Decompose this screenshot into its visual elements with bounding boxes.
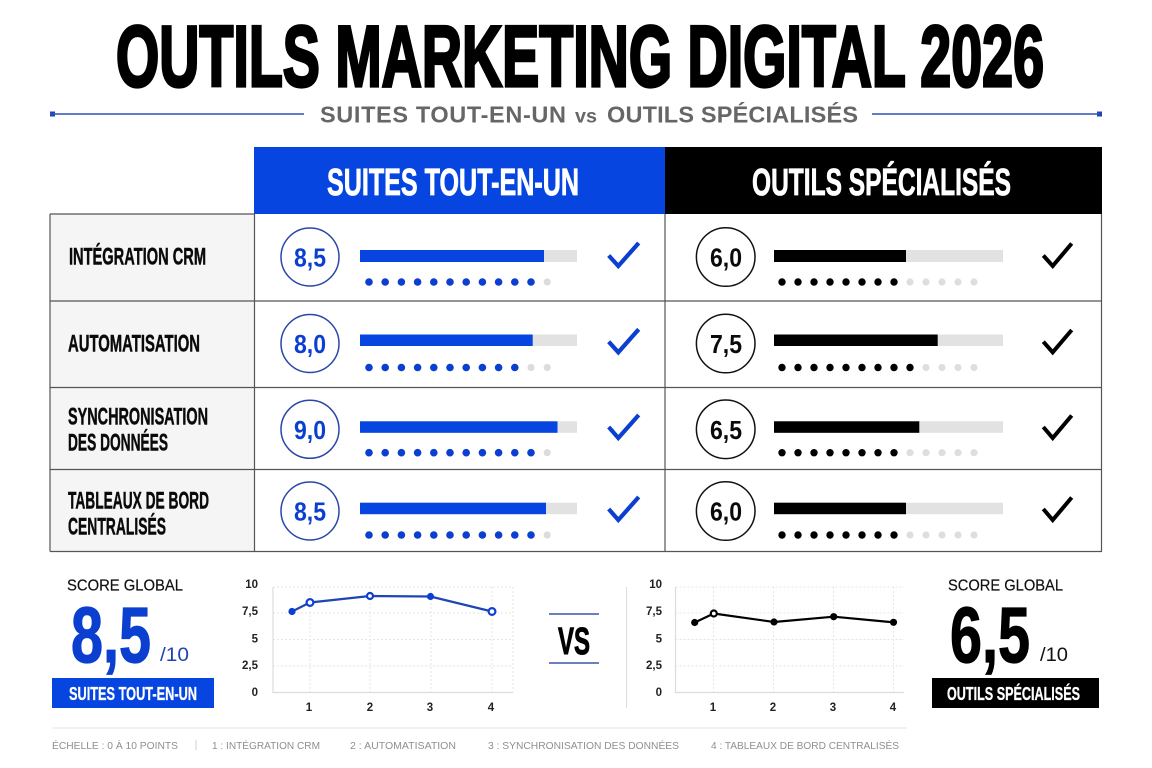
suites row 1 score: 8,5 xyxy=(294,242,326,272)
line chart: suites: 2 xyxy=(367,702,373,714)
footer legend: 1 : INTÉGRATION CRM xyxy=(212,739,320,752)
outils row 3 score xyxy=(696,400,1072,459)
column header: outils: OUTILS SPÉCIALISÉS xyxy=(752,160,1011,204)
vs badge: VS xyxy=(558,621,590,663)
row label: synchronisation: DES DONNÉES xyxy=(68,428,168,456)
line chart: suites xyxy=(242,579,513,714)
line chart: outils: 7,5 xyxy=(646,606,663,618)
row label: tableaux de bord: TABLEAUX DE BORD xyxy=(68,488,209,514)
panel: global score outils: /10 xyxy=(1040,645,1068,666)
line chart: outils: 1 xyxy=(710,702,717,714)
subtitle with rules: OUTILS SPÉCIALISÉS xyxy=(607,100,858,128)
outils row 1 score: 6,0 xyxy=(710,242,742,272)
row label: intégration CRM: INTÉGRATION CRM xyxy=(69,242,206,270)
panel: global score outils: OUTILS SPÉCIALISÉS xyxy=(947,683,1080,704)
row label backgrounds and grid xyxy=(50,214,1102,552)
line chart: outils: 4 xyxy=(890,702,897,714)
panel: global score outils: 6,5 xyxy=(950,590,1030,679)
suites row 3 score xyxy=(281,400,639,458)
column header: outils xyxy=(665,147,1102,214)
line chart: suites: 10 xyxy=(245,579,258,591)
line chart: outils: 5 xyxy=(656,634,663,646)
row label: automatisation: AUTOMATISATION xyxy=(68,330,200,358)
line chart: suites: 1 xyxy=(306,702,313,714)
suites row 2 score xyxy=(281,314,639,372)
comparison table xyxy=(50,147,1102,552)
line chart: outils: 2,5 xyxy=(646,660,663,672)
line chart: outils: 0 xyxy=(656,687,662,699)
suites row 3 score: 9,0 xyxy=(294,415,326,445)
line chart: suites: 2,5 xyxy=(242,660,259,672)
row label: tableaux de bord xyxy=(68,488,209,540)
footer legend: 2 : AUTOMATISATION xyxy=(350,740,456,752)
subtitle with rules: SUITES TOUT-EN-UN xyxy=(320,102,566,128)
panel: global score suites: 8,5 xyxy=(71,590,151,679)
footer legend xyxy=(52,739,899,752)
outils row 4 score xyxy=(696,482,1072,540)
panel: global score outils: SCORE GLOBAL xyxy=(948,578,1063,594)
line chart: suites: 4 xyxy=(488,702,495,714)
panel: global score outils xyxy=(932,578,1099,708)
outils row 2 score: 7,5 xyxy=(710,329,742,359)
footer legend: 4 : TABLEAUX DE BORD CENTRALISÉS xyxy=(711,739,899,752)
suites row 4 score xyxy=(281,482,639,540)
panel: global score suites: SUITES TOUT-EN-UN xyxy=(69,684,197,704)
row label: tableaux de bord: CENTRALISÉS xyxy=(68,512,166,540)
line chart: outils: 10 xyxy=(649,579,662,591)
line chart: suites: 0 xyxy=(252,687,258,699)
line chart: suites: 3 xyxy=(427,702,433,714)
row label: synchronisation: SYNCHRONISATION xyxy=(68,404,208,430)
line chart: suites: 7,5 xyxy=(242,606,259,618)
outils row 2 score xyxy=(696,314,1072,373)
subtitle with rules: vs xyxy=(575,106,597,128)
outils row 3 score: 6,5 xyxy=(710,415,742,445)
panel: global score suites: SCORE GLOBAL xyxy=(67,578,183,594)
suites row 1 score xyxy=(281,228,639,286)
column header: suites: SUITES TOUT-EN-UN xyxy=(327,162,579,204)
panel: global score suites: /10 xyxy=(160,645,189,666)
line chart: outils: 2 xyxy=(770,702,776,714)
footer legend: 3 : SYNCHRONISATION DES DONNÉES xyxy=(488,739,679,752)
vs badge xyxy=(549,614,599,663)
line chart: outils: 3 xyxy=(830,702,836,714)
panel: global score suites xyxy=(52,578,214,708)
suites row 4 score: 8,5 xyxy=(294,496,326,526)
subtitle with rules xyxy=(50,100,1102,128)
outils row 4 score: 6,0 xyxy=(710,496,742,526)
footer legend: ÉCHELLE : 0 À 10 POINTS xyxy=(52,739,178,752)
suites row 2 score: 8,0 xyxy=(294,329,326,359)
column header: suites xyxy=(254,147,665,214)
row label: synchronisation xyxy=(68,404,208,456)
line chart: outils xyxy=(646,579,904,714)
line chart: suites: 5 xyxy=(252,634,259,646)
outils row 1 score xyxy=(696,228,1072,286)
